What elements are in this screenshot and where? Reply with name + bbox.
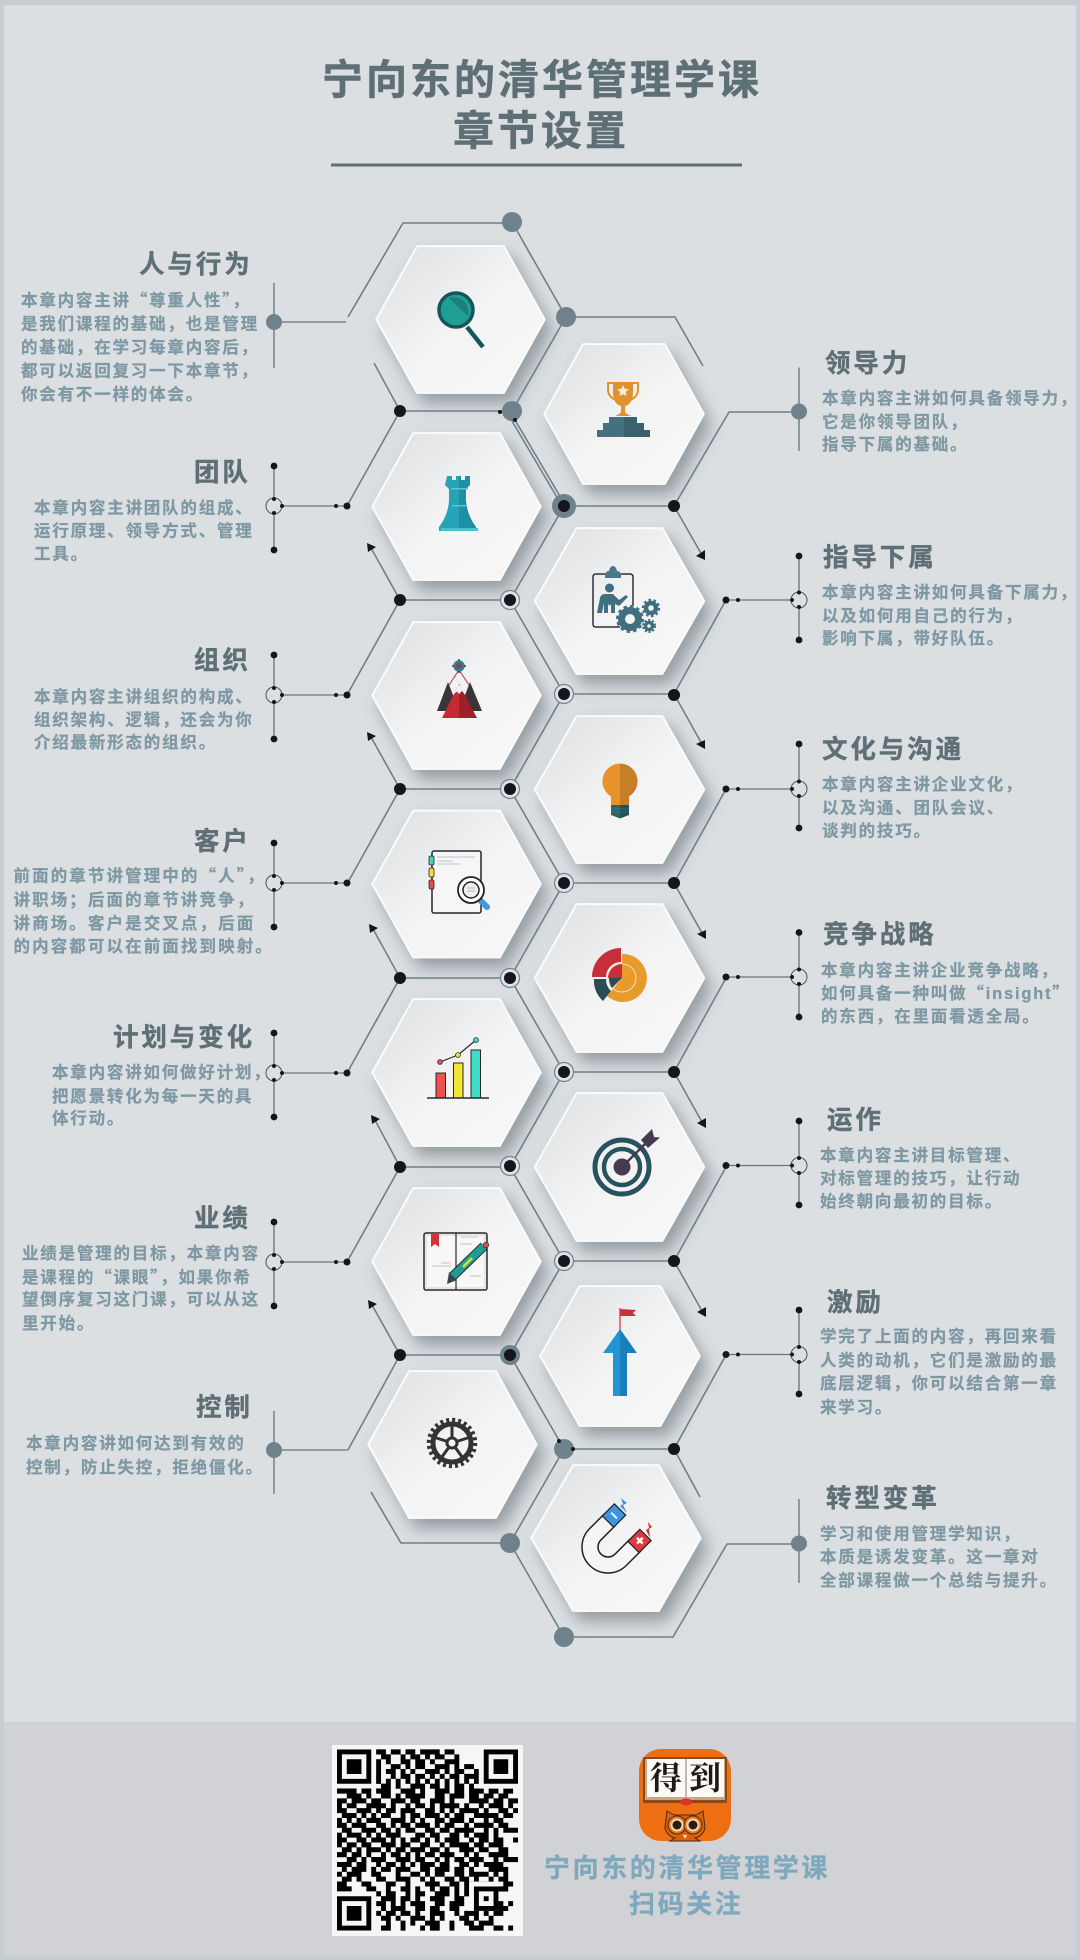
chapter: 转型变革: 学习和使用管理学知识， (820, 1524, 1021, 1544)
chapter: 文化与沟通 (722, 736, 1023, 840)
chapter: 组织: 本章内容主讲组织的构成、 (34, 686, 254, 706)
chapter: 业绩: 是课程的“课眼”，如果你希 (22, 1264, 252, 1288)
chapter: 人与行为: 人与行为 (139, 251, 253, 279)
chapter: 文化与沟通: 文化与沟通 (822, 736, 964, 764)
chapter: 客户 (14, 827, 350, 956)
chapter: 领导力: 领导力 (825, 350, 910, 378)
chapter: 控制 (26, 1394, 348, 1494)
chapter: 客户: 客户 (194, 827, 251, 856)
chapter: 业绩: 里开始。 (22, 1314, 95, 1333)
title (322, 57, 762, 166)
chapter: 激励: 激励 (827, 1289, 884, 1317)
chapter: 转型变革: 本质是诱发变革。这一章对 (820, 1546, 1040, 1566)
chapter: 激励 (722, 1289, 1058, 1417)
chapter: 人与行为 (21, 251, 346, 404)
chapter: 指导下属: 影响下属，带好队伍。 (822, 629, 1005, 648)
title: 宁向东的清华管理学课 (322, 57, 762, 103)
footer caption: 扫码关注 (629, 1889, 743, 1919)
hexagon: 文化与沟通 light bulb (535, 716, 704, 863)
chapter: 团队: 工具。 (34, 546, 89, 564)
hexagon: 团队 rook (372, 433, 541, 580)
chapter: 转型变革 (791, 1485, 1058, 1590)
icon: owl (665, 1811, 705, 1841)
title: 章节设置 (453, 108, 629, 154)
chapter: 激励: 人类的动机，它们是激励的最 (820, 1350, 1058, 1370)
chapter: 领导力: 它是你领导团队， (822, 412, 968, 432)
chapter: 计划与变化: 把愿景转化为每一天的具 (52, 1086, 253, 1106)
chapter: 团队 (34, 459, 350, 564)
chapter: 计划与变化 (52, 1024, 350, 1128)
chapter: 团队: 本章内容主讲团队的组成、 (34, 498, 254, 518)
footer caption: 宁向东的清华管理学课 (544, 1853, 830, 1883)
hexagon: 领导力 trophy (544, 344, 704, 484)
chapter: 竞争战略: 如何具备一种叫做“insight” (821, 980, 1071, 1004)
chapter: 客户: 前面的章节讲管理中的“人”， (14, 862, 266, 886)
chapter: 激励: 来学习。 (820, 1397, 893, 1417)
chapter: 领导力: 本章内容主讲如何具备领导力， (822, 388, 1078, 408)
chapter: 指导下属: 本章内容主讲如何具备下属力， (822, 582, 1078, 602)
chapter: 运作: 对标管理的技巧，让行动 (820, 1168, 1021, 1188)
chapter: 激励: 底层逻辑，你可以结合第一章 (820, 1373, 1058, 1393)
chapter: 领导力: 指导下属的基础。 (822, 435, 968, 454)
network nodes (394, 212, 680, 1647)
arrowheads (367, 543, 706, 1317)
chapter: 业绩: 业绩是管理的目标，本章内容 (22, 1243, 260, 1263)
hexagon: 控制 gear (368, 1371, 537, 1518)
chapter: 指导下属: 以及如何用自己的行为， (822, 606, 1023, 626)
chapter: 组织: 组织架构、逻辑，还会为你 (34, 710, 254, 730)
chapter: 竞争战略 (722, 921, 1071, 1026)
app logo: 得到: 到 (689, 1753, 721, 1799)
chapter: 领导力 (791, 350, 1078, 454)
chapter: 指导下属: 指导下属 (823, 544, 937, 572)
chapter: 人与行为: 本章内容主讲“尊重人性”， (21, 287, 251, 311)
chapter: 文化与沟通: 谈判的技巧。 (822, 822, 932, 840)
hexagon: 组织 mountain (372, 622, 541, 769)
chapter: 客户: 讲职场；后面的章节讲竞争， (14, 890, 255, 910)
chapter: 组织: 组织 (194, 647, 251, 675)
chapter: 业绩: 业绩 (194, 1205, 251, 1233)
chapter: 转型变革: 全部课程做一个总结与提升。 (820, 1570, 1058, 1590)
chapter: 运作: 始终朝向最初的目标。 (820, 1191, 1003, 1211)
footer caption (544, 1853, 830, 1919)
chapter: 业绩 (22, 1205, 350, 1333)
chapter: 团队: 运行原理、领导方式、管理 (34, 520, 254, 540)
chapter: 文化与沟通: 本章内容主讲企业文化， (822, 774, 1023, 794)
chapter: 客户: 的内容都可以在前面找到映射。 (14, 936, 274, 956)
hexagon: 运作 target (535, 1093, 704, 1241)
chapter: 组织: 介绍最新形态的组织。 (34, 732, 217, 752)
hexagon: 客户 document search (372, 811, 541, 957)
chapter: 人与行为: 是我们课程的基础，也是管理 (21, 314, 259, 334)
chapter: 文化与沟通: 以及沟通、团队会议、 (822, 798, 1005, 818)
chapter: 运作 (722, 1106, 1021, 1211)
chapter: 运作: 运作 (827, 1106, 884, 1134)
hexagon: 激励 arrow and flag (540, 1286, 700, 1426)
hexagon: 竞争战略 donut chart (535, 904, 704, 1052)
chapter: 计划与变化: 本章内容讲如何做好计划， (52, 1062, 272, 1082)
hexagon: 指导下属 presenter and gears (535, 528, 704, 674)
chapter: 控制: 控制 (196, 1394, 253, 1422)
chapter: 控制: 控制，防止失控，拒绝僵化。 (26, 1457, 264, 1477)
chapter: 竞争战略: 的东西，在里面看透全局。 (821, 1006, 1041, 1026)
chapter: 人与行为: 的基础，在学习每章内容后， (21, 337, 259, 357)
chapter: 竞争战略: 本章内容主讲企业竞争战略， (821, 960, 1059, 980)
chapter: 人与行为: 你会有不一样的体会。 (21, 384, 204, 404)
app logo: 得到: 得 (650, 1753, 682, 1799)
chapter: 计划与变化: 体行动。 (52, 1109, 125, 1128)
chapter: 运作: 本章内容主讲目标管理、 (820, 1145, 1021, 1165)
chapter: 竞争战略: 竞争战略 (823, 921, 937, 949)
app logo: 得到 (639, 1749, 731, 1841)
chapter: 客户: 讲商场。客户是交叉点，后面 (14, 913, 255, 933)
chapter: 计划与变化: 计划与变化 (113, 1024, 255, 1052)
hexagon: 人与行为 magnifier (376, 246, 545, 393)
footer band (4, 1722, 1076, 1955)
chapter: 人与行为: 都可以返回复习一下本章节， (21, 360, 259, 380)
chapter: 激励: 学完了上面的内容，再回来看 (820, 1326, 1058, 1346)
hexagon: 计划与变化 bar chart (372, 999, 541, 1146)
hexagon: 业绩 open book and pen (372, 1188, 541, 1335)
chapter: 组织 (34, 647, 350, 752)
chapter: 业绩: 望倒序复习这门课，可以从这 (22, 1289, 260, 1309)
QR code (332, 1745, 528, 1936)
chapter: 转型变革: 转型变革 (826, 1485, 940, 1513)
chapter: 团队: 团队 (194, 459, 251, 487)
chapter: 控制: 本章内容讲如何达到有效的 (26, 1433, 246, 1453)
hexagon: 转型变革 magnet (531, 1465, 701, 1611)
hexagon connector network (347, 212, 799, 1647)
chapter: 指导下属 (722, 544, 1078, 648)
